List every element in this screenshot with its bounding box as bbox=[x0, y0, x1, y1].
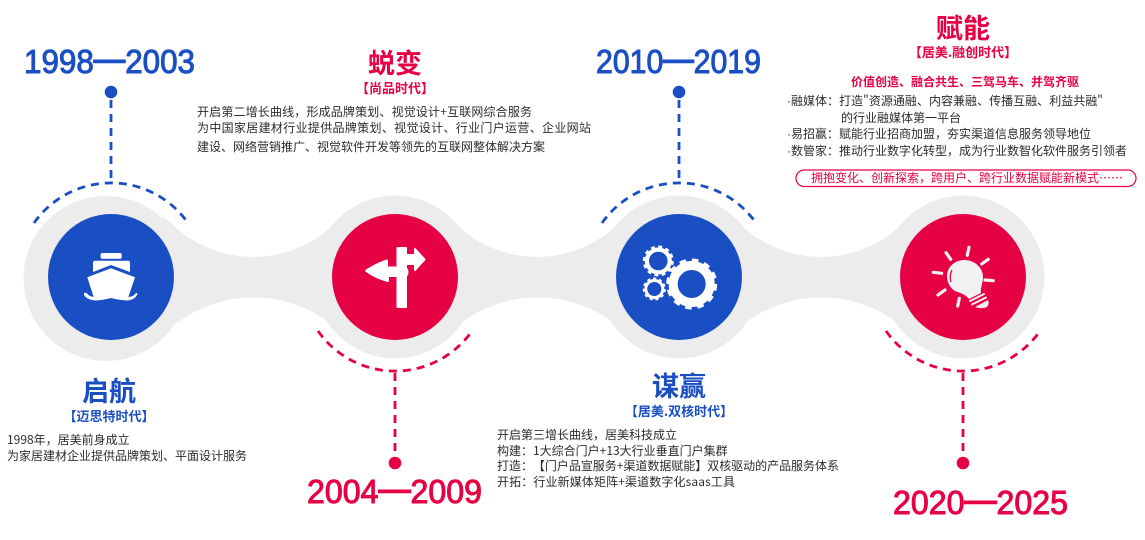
text block: 赋能: ·数管家：推动行业数字化转型，成为行业数智化软件服务引领者 bbox=[787, 142, 1127, 159]
text block: 赋能: 的行业融媒体第一平台 bbox=[841, 109, 961, 126]
stage 1 node bbox=[48, 214, 174, 340]
year: 2004-2009: 2009 bbox=[411, 474, 482, 511]
text block: 蛻变: 为中国家居建材行业提供品牌策划、视觉设计、行业门户运营、企业网站 bbox=[197, 119, 591, 136]
text block: 谋赢: 打造：【门户品宣服务+渠道数据赋能】双核驱动的产品服务体系 bbox=[497, 457, 839, 474]
text block: 启航: 1998年，居美前身成立 bbox=[7, 431, 130, 448]
year: 2010-2019: 2019 bbox=[694, 44, 761, 81]
icon: signpost bbox=[366, 248, 424, 307]
text block: 谋赢: 谋赢 bbox=[652, 365, 706, 404]
text block: 蛻变 bbox=[197, 42, 591, 155]
year: 1998-2003: — bbox=[94, 41, 126, 78]
text block: 赋能: 赋能 bbox=[936, 7, 990, 46]
year: 1998-2003: 2003 bbox=[125, 44, 195, 81]
icon: ship bbox=[84, 253, 138, 300]
text block: 蛻变: 开启第二增长曲线，形成品牌策划、视觉设计+互联网综合服务 bbox=[197, 103, 532, 120]
stage 4 node bbox=[900, 214, 1026, 340]
stage 2 node bbox=[332, 214, 458, 340]
year: 2004-2009: — bbox=[378, 471, 411, 508]
connector: 2004-2009 bbox=[318, 331, 472, 469]
text block: 启航: 【迈思特时代】 bbox=[63, 406, 155, 425]
text block: 蛻变: 【尚品时代】 bbox=[356, 78, 434, 97]
year: 2004-2009: 2004 bbox=[307, 474, 382, 511]
connector: 2020-2025 bbox=[886, 331, 1040, 469]
text block: 启航: 启航 bbox=[82, 370, 136, 409]
text block: 谋赢 bbox=[497, 365, 839, 490]
text block: 谋赢: 构建：1大综合门户+13大行业垂直门户集群 bbox=[497, 442, 728, 459]
year: 2010-2019: 2010 bbox=[596, 44, 671, 81]
text block: 启航: 为家居建材企业提供品牌策划、平面设计服务 bbox=[7, 447, 247, 464]
stage 3 node bbox=[616, 214, 742, 340]
year: 2020-2025: 2020 bbox=[893, 485, 968, 522]
callout: new model pill: 拥抱变化、创新探索，跨用户、跨行业数据赋能新模式…… bbox=[811, 169, 1123, 186]
icon: gears bbox=[644, 247, 715, 308]
text block: 赋能: ·融媒体：打造"资源通融、内容兼融、传播互融、利益共融" bbox=[787, 92, 1103, 109]
text block: 启航 bbox=[7, 370, 247, 464]
text block: 谋赢: 开启第三增长曲线，居美科技成立 bbox=[497, 426, 677, 443]
text block: 赋能: 【居美.融创时代】 bbox=[909, 42, 1017, 61]
text block: 蛻变: 蜕变 bbox=[368, 42, 422, 81]
text block: 谋赢: 【居美.双核时代】 bbox=[625, 401, 733, 420]
text block: 谋赢: 开拓：行业新媒体矩阵+渠道数字化saas工具 bbox=[497, 473, 735, 490]
text block: 蛻变: 建设、网络营销推广、视觉软件开发等领先的互联网整体解决方案 bbox=[197, 138, 545, 155]
text block: 赋能: ·易招赢：赋能行业招商加盟，夯实渠道信息服务领导地位 bbox=[787, 125, 1091, 142]
text block: 赋能: 价值创造、融合共生、三驾马车、并驾齐驱 bbox=[851, 73, 1079, 90]
year: 1998-2003: 1998 bbox=[24, 44, 99, 81]
year: 2010-2019: — bbox=[663, 41, 694, 78]
text block: 赋能 bbox=[787, 7, 1136, 186]
connector: 1998-2003 bbox=[34, 86, 188, 223]
year: 2020-2025: 2025 bbox=[997, 485, 1068, 522]
icon: light bulb bbox=[933, 247, 993, 308]
connector: 2010-2019 bbox=[602, 86, 756, 223]
timeline track bbox=[24, 196, 1044, 361]
year: 2020-2025: — bbox=[964, 482, 997, 519]
